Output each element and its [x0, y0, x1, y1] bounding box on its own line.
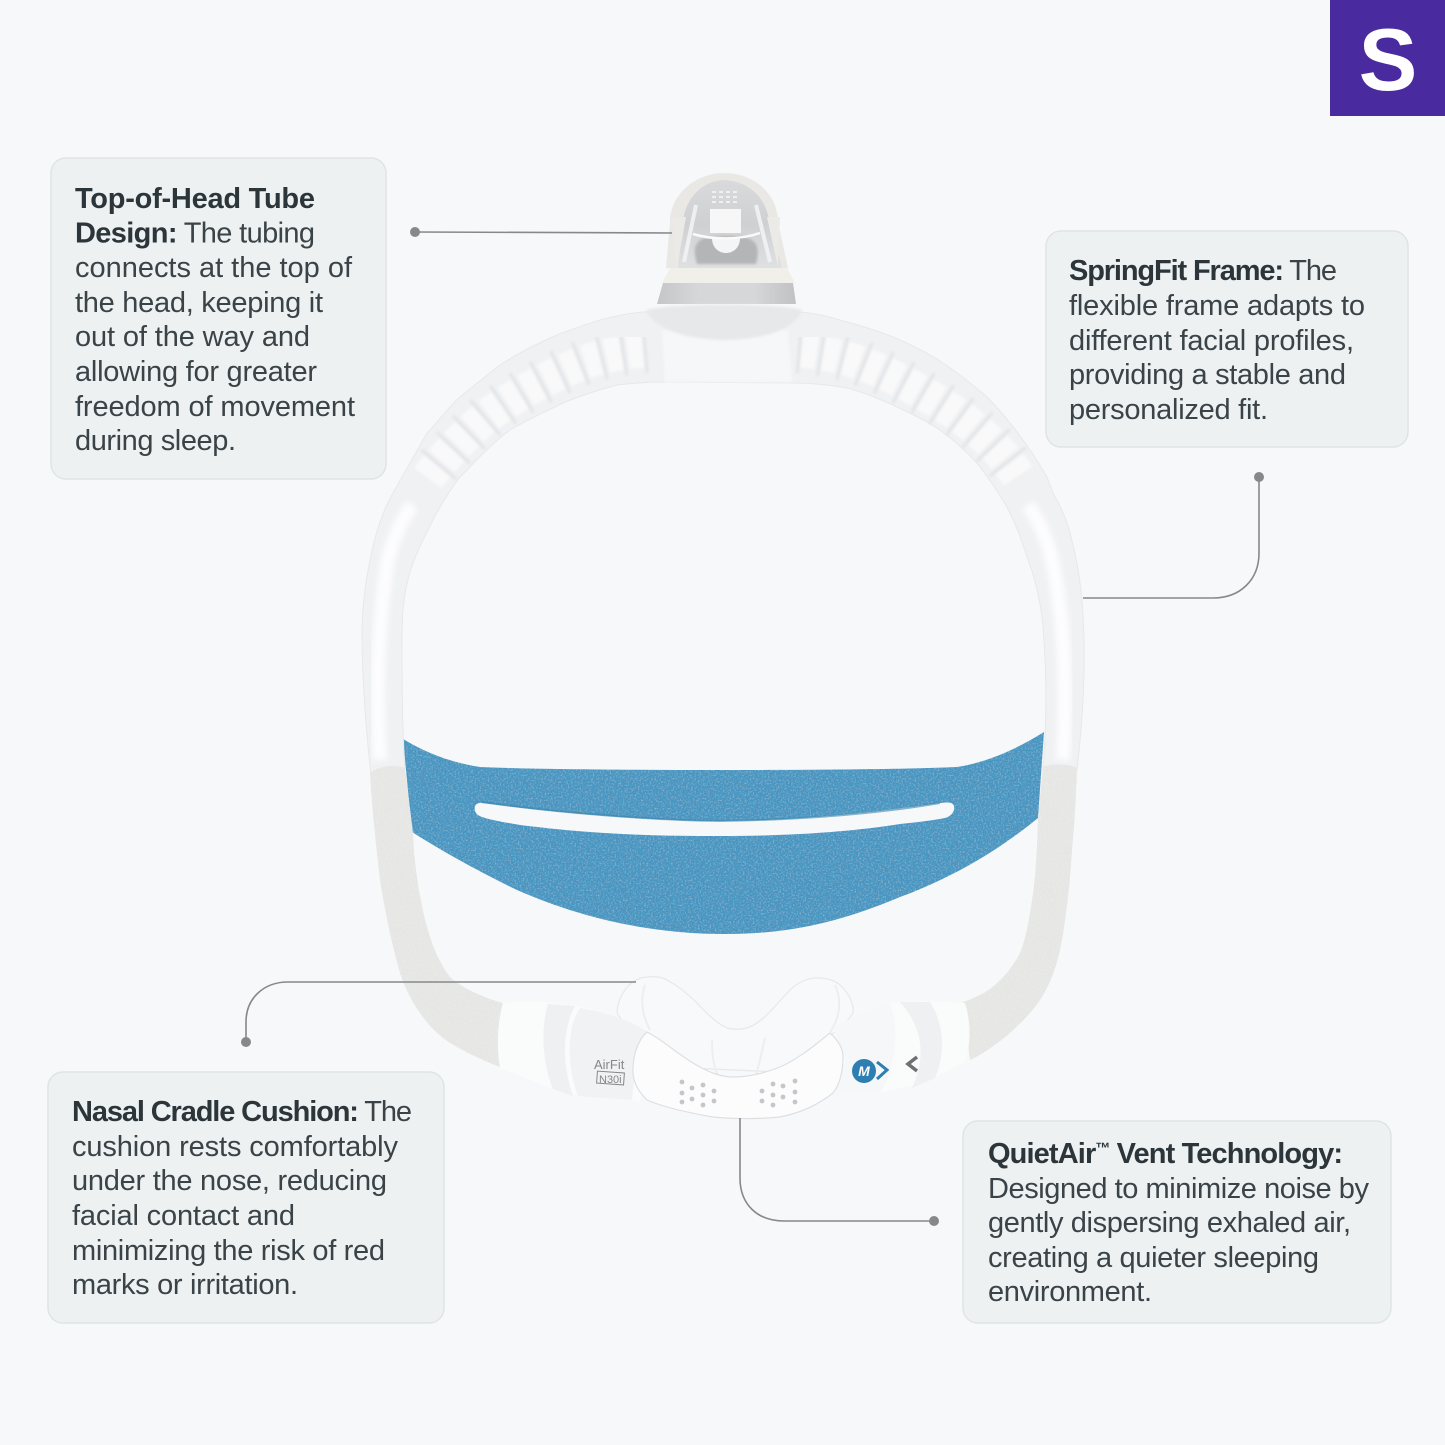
panel: SpringFit frame: flexible frame adapts to [1069, 290, 1365, 322]
panel: nasal cradle cushion: under the nose, reducing [72, 1165, 387, 1197]
connector: top-of-head tube [410, 227, 672, 237]
blue headgear band [403, 732, 1044, 934]
panel: top-of-head tube design: connects at the top of [75, 252, 353, 284]
panel: top-of-head tube design [51, 158, 386, 479]
panel: SpringFit frame: providing a stable and [1069, 359, 1346, 391]
panel: SpringFit frame [1046, 231, 1408, 447]
panel: QuietAir vent technology [963, 1121, 1391, 1323]
size marker M: M [858, 1063, 870, 1079]
panel: QuietAir vent technology: gently dispersing exhaled air, [988, 1207, 1351, 1239]
right clear elbow [833, 1001, 970, 1095]
AirFit N30i label [594, 1057, 625, 1086]
size marker M [852, 1057, 917, 1083]
panel: top-of-head tube design: Top-of-Head Tube [75, 183, 315, 215]
left clear elbow [498, 1002, 650, 1102]
right ribs [796, 350, 1018, 476]
left ribs [428, 350, 648, 478]
nasal cradle cushion [498, 977, 970, 1118]
panel: top-of-head tube design: out of the way and [75, 321, 310, 353]
connector: SpringFit frame [1083, 472, 1264, 598]
centre tube block [662, 330, 792, 382]
frame tube [362, 312, 1084, 775]
panel: QuietAir vent technology: Designed to minimize noise by [988, 1173, 1370, 1205]
clear-body glass shading [570, 1008, 648, 1100]
connector: nasal cradle cushion [241, 982, 636, 1047]
panel: SpringFit frame: personalized fit. [1069, 394, 1268, 426]
panel: QuietAir vent technology: QuietAir [988, 1138, 1096, 1170]
panel: nasal cradle cushion: Nasal Cradle Cushion: The [72, 1096, 412, 1128]
AirFit N30i label: AirFit [594, 1057, 625, 1072]
top swivel connector [646, 173, 802, 340]
lower vent body [633, 1032, 843, 1118]
panel: top-of-head tube design: the head, keeping it [75, 287, 323, 319]
product illustration: nasal cradle mask [362, 173, 1084, 1118]
panel: nasal cradle cushion: minimizing the risk of red [72, 1235, 385, 1267]
size badge: S [1330, 0, 1445, 116]
panel: SpringFit frame: SpringFit Frame: The [1069, 255, 1337, 287]
panel: nasal cradle cushion: cushion rests comfortably [72, 1131, 398, 1163]
vent holes [680, 1079, 797, 1107]
side tube highlights [378, 505, 412, 760]
panel: top-of-head tube design: allowing for greater [75, 356, 317, 388]
panel: QuietAir vent technology: Vent Technology: [1109, 1138, 1343, 1170]
panel: QuietAir vent technology: environment. [988, 1276, 1152, 1308]
glass grid [712, 192, 740, 202]
panel: nasal cradle cushion: marks or irritation. [72, 1269, 298, 1301]
AirFit N30i label: N30i [599, 1074, 622, 1086]
panel: nasal cradle cushion [48, 1072, 444, 1323]
panel: top-of-head tube design: Design: The tubing [75, 218, 315, 250]
grey fabric sleeves [370, 764, 1077, 1067]
connector: QuietAir vent [740, 1118, 939, 1226]
panel: nasal cradle cushion: facial contact and [72, 1200, 295, 1232]
panel: QuietAir vent technology: creating a quieter sleeping [988, 1242, 1319, 1274]
panel: top-of-head tube design: freedom of movement [75, 391, 355, 423]
panel: top-of-head tube design: during sleep. [75, 425, 236, 457]
panel: SpringFit frame: different facial profiles, [1069, 325, 1354, 357]
size badge: S: S [1359, 10, 1417, 109]
panel: QuietAir vent technology: ™ [1095, 1140, 1110, 1157]
nasal cradle [617, 977, 853, 1072]
